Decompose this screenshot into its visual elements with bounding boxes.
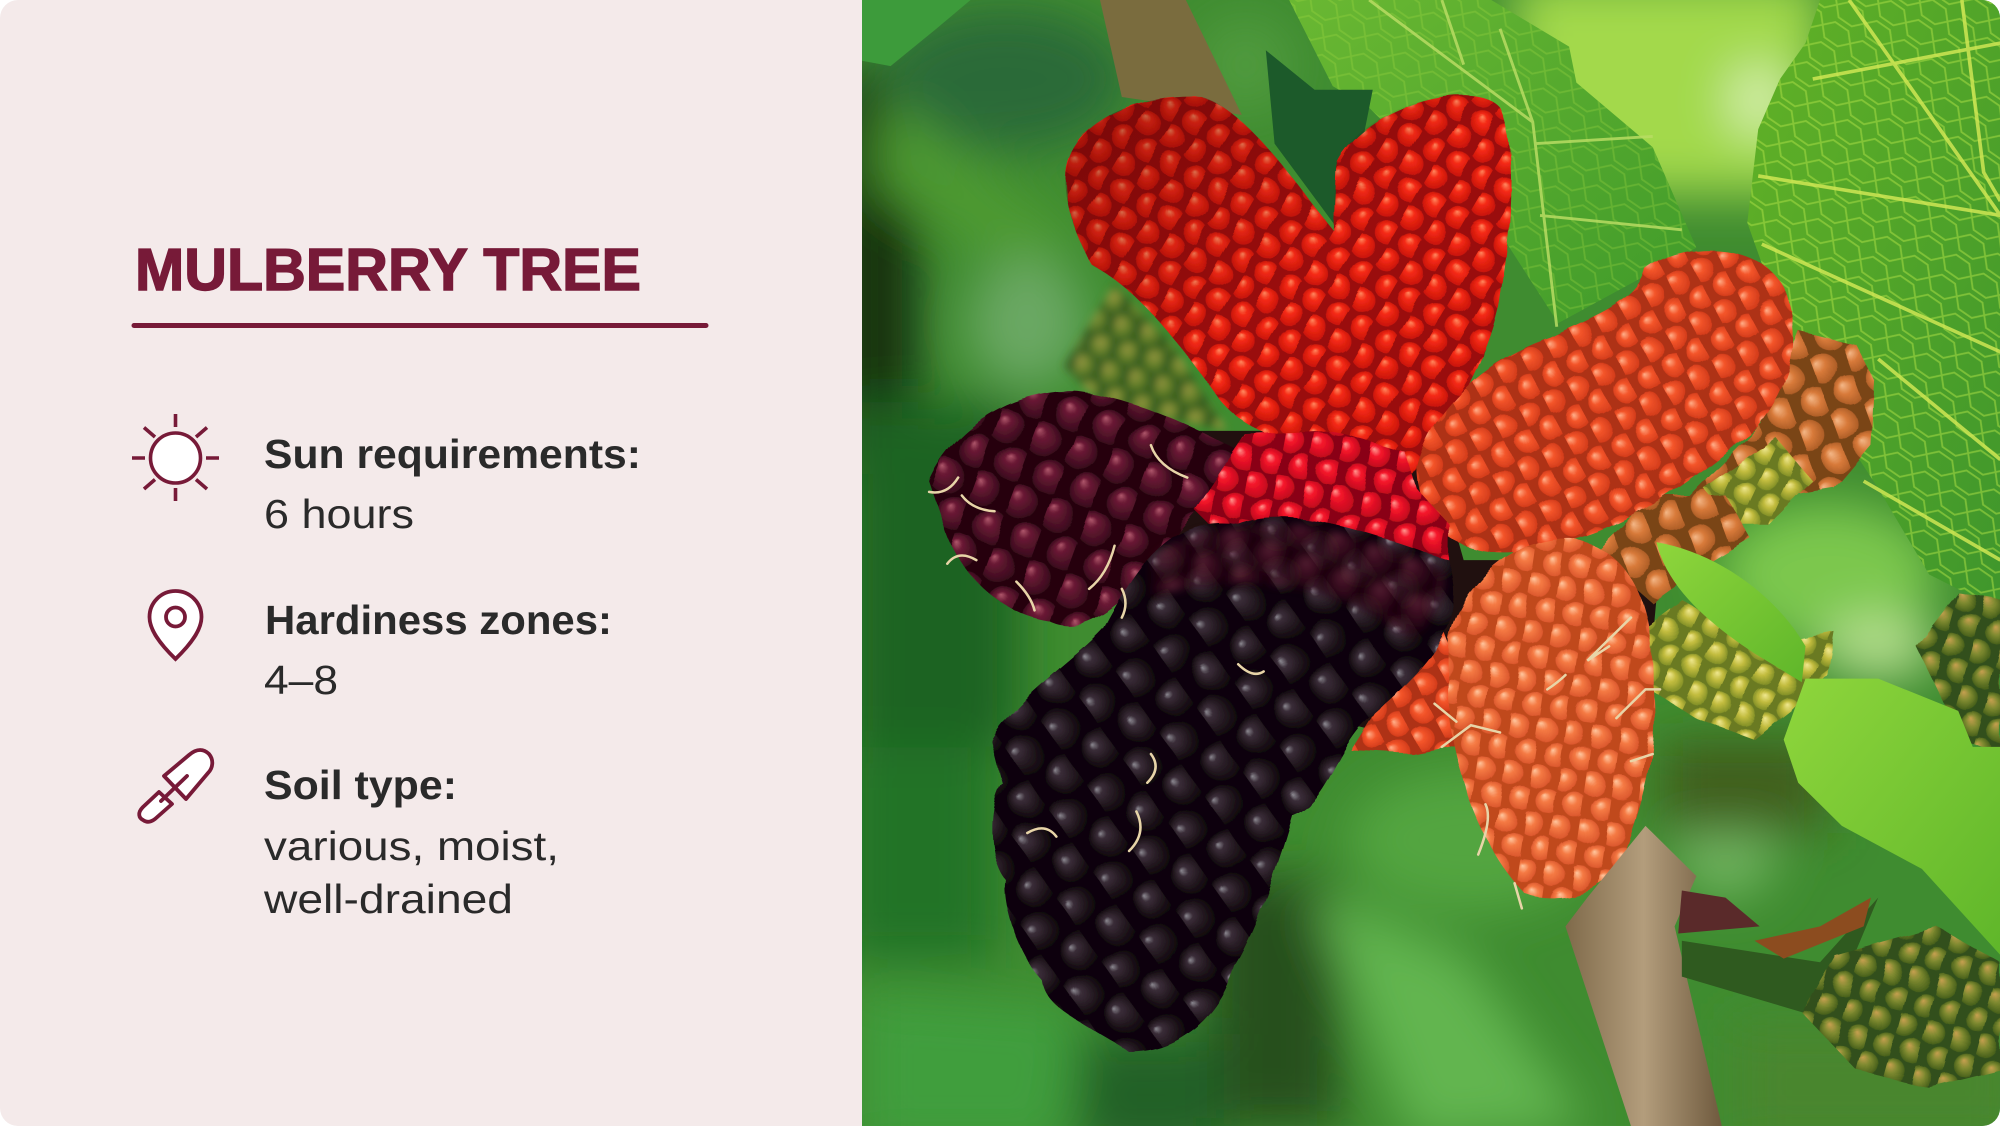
title underline <box>132 323 708 328</box>
berry: bright red centre <box>1195 431 1449 574</box>
title: MULBERRY TREE <box>135 237 641 303</box>
dried leaf: brown <box>1755 898 1871 959</box>
text: hardiness zones <box>264 597 612 703</box>
berry: far right <box>1916 592 2000 754</box>
icon: sun <box>132 414 219 501</box>
berry: lime between back right and centre <box>1704 438 1813 524</box>
stems lower right <box>1682 898 1878 1020</box>
photo background foliage <box>831 0 2000 1126</box>
text: hardiness zones: Hardiness zones: <box>265 597 612 643</box>
text: sun requirements <box>264 431 641 537</box>
icon: location pin <box>150 591 202 659</box>
text: hardiness zones: 4–8 <box>264 657 338 703</box>
photo: mulberries on a branch <box>831 0 2000 1126</box>
berry: black ripe <box>991 518 1455 1052</box>
berry: peach orange lower <box>1449 538 1654 898</box>
berry: red pair <box>1065 95 1512 474</box>
branch: lower <box>1565 826 1722 1126</box>
branch: upper <box>1100 0 1242 115</box>
berry: yellow green <box>1638 600 1835 740</box>
text: sun requirements: 6 hours <box>264 491 414 537</box>
leaf: dark centre <box>1266 50 1373 237</box>
icon: trowel <box>139 750 212 822</box>
panel: plant facts <box>0 0 862 1126</box>
berry: green lower right <box>1802 926 2000 1088</box>
leaf: top corner <box>860 0 971 66</box>
text: soil type: Soil type: <box>264 762 457 808</box>
text: sun requirements: Sun requirements: <box>264 431 641 477</box>
berry: orange red right <box>1416 250 1793 553</box>
text: soil type <box>263 762 559 922</box>
berry: dark purple left <box>929 391 1242 626</box>
leaf: large right <box>1747 0 2000 610</box>
leaf: small bright <box>1656 542 1805 682</box>
shadow behind berries <box>1178 430 1656 728</box>
text: soil type: well-drained <box>263 876 513 922</box>
berry: small orange behind <box>1352 632 1455 755</box>
berry: unripe back left <box>1064 284 1227 431</box>
leaf: bright lower right <box>1784 679 2000 955</box>
berry: amber lower <box>1595 495 1751 603</box>
leaf: top centre <box>1289 0 1696 327</box>
berry hairs <box>929 445 1660 908</box>
berry: amber back right <box>1690 330 1875 496</box>
text: soil type: various, moist, <box>264 823 559 869</box>
dried leaf: dark red <box>1678 890 1760 934</box>
